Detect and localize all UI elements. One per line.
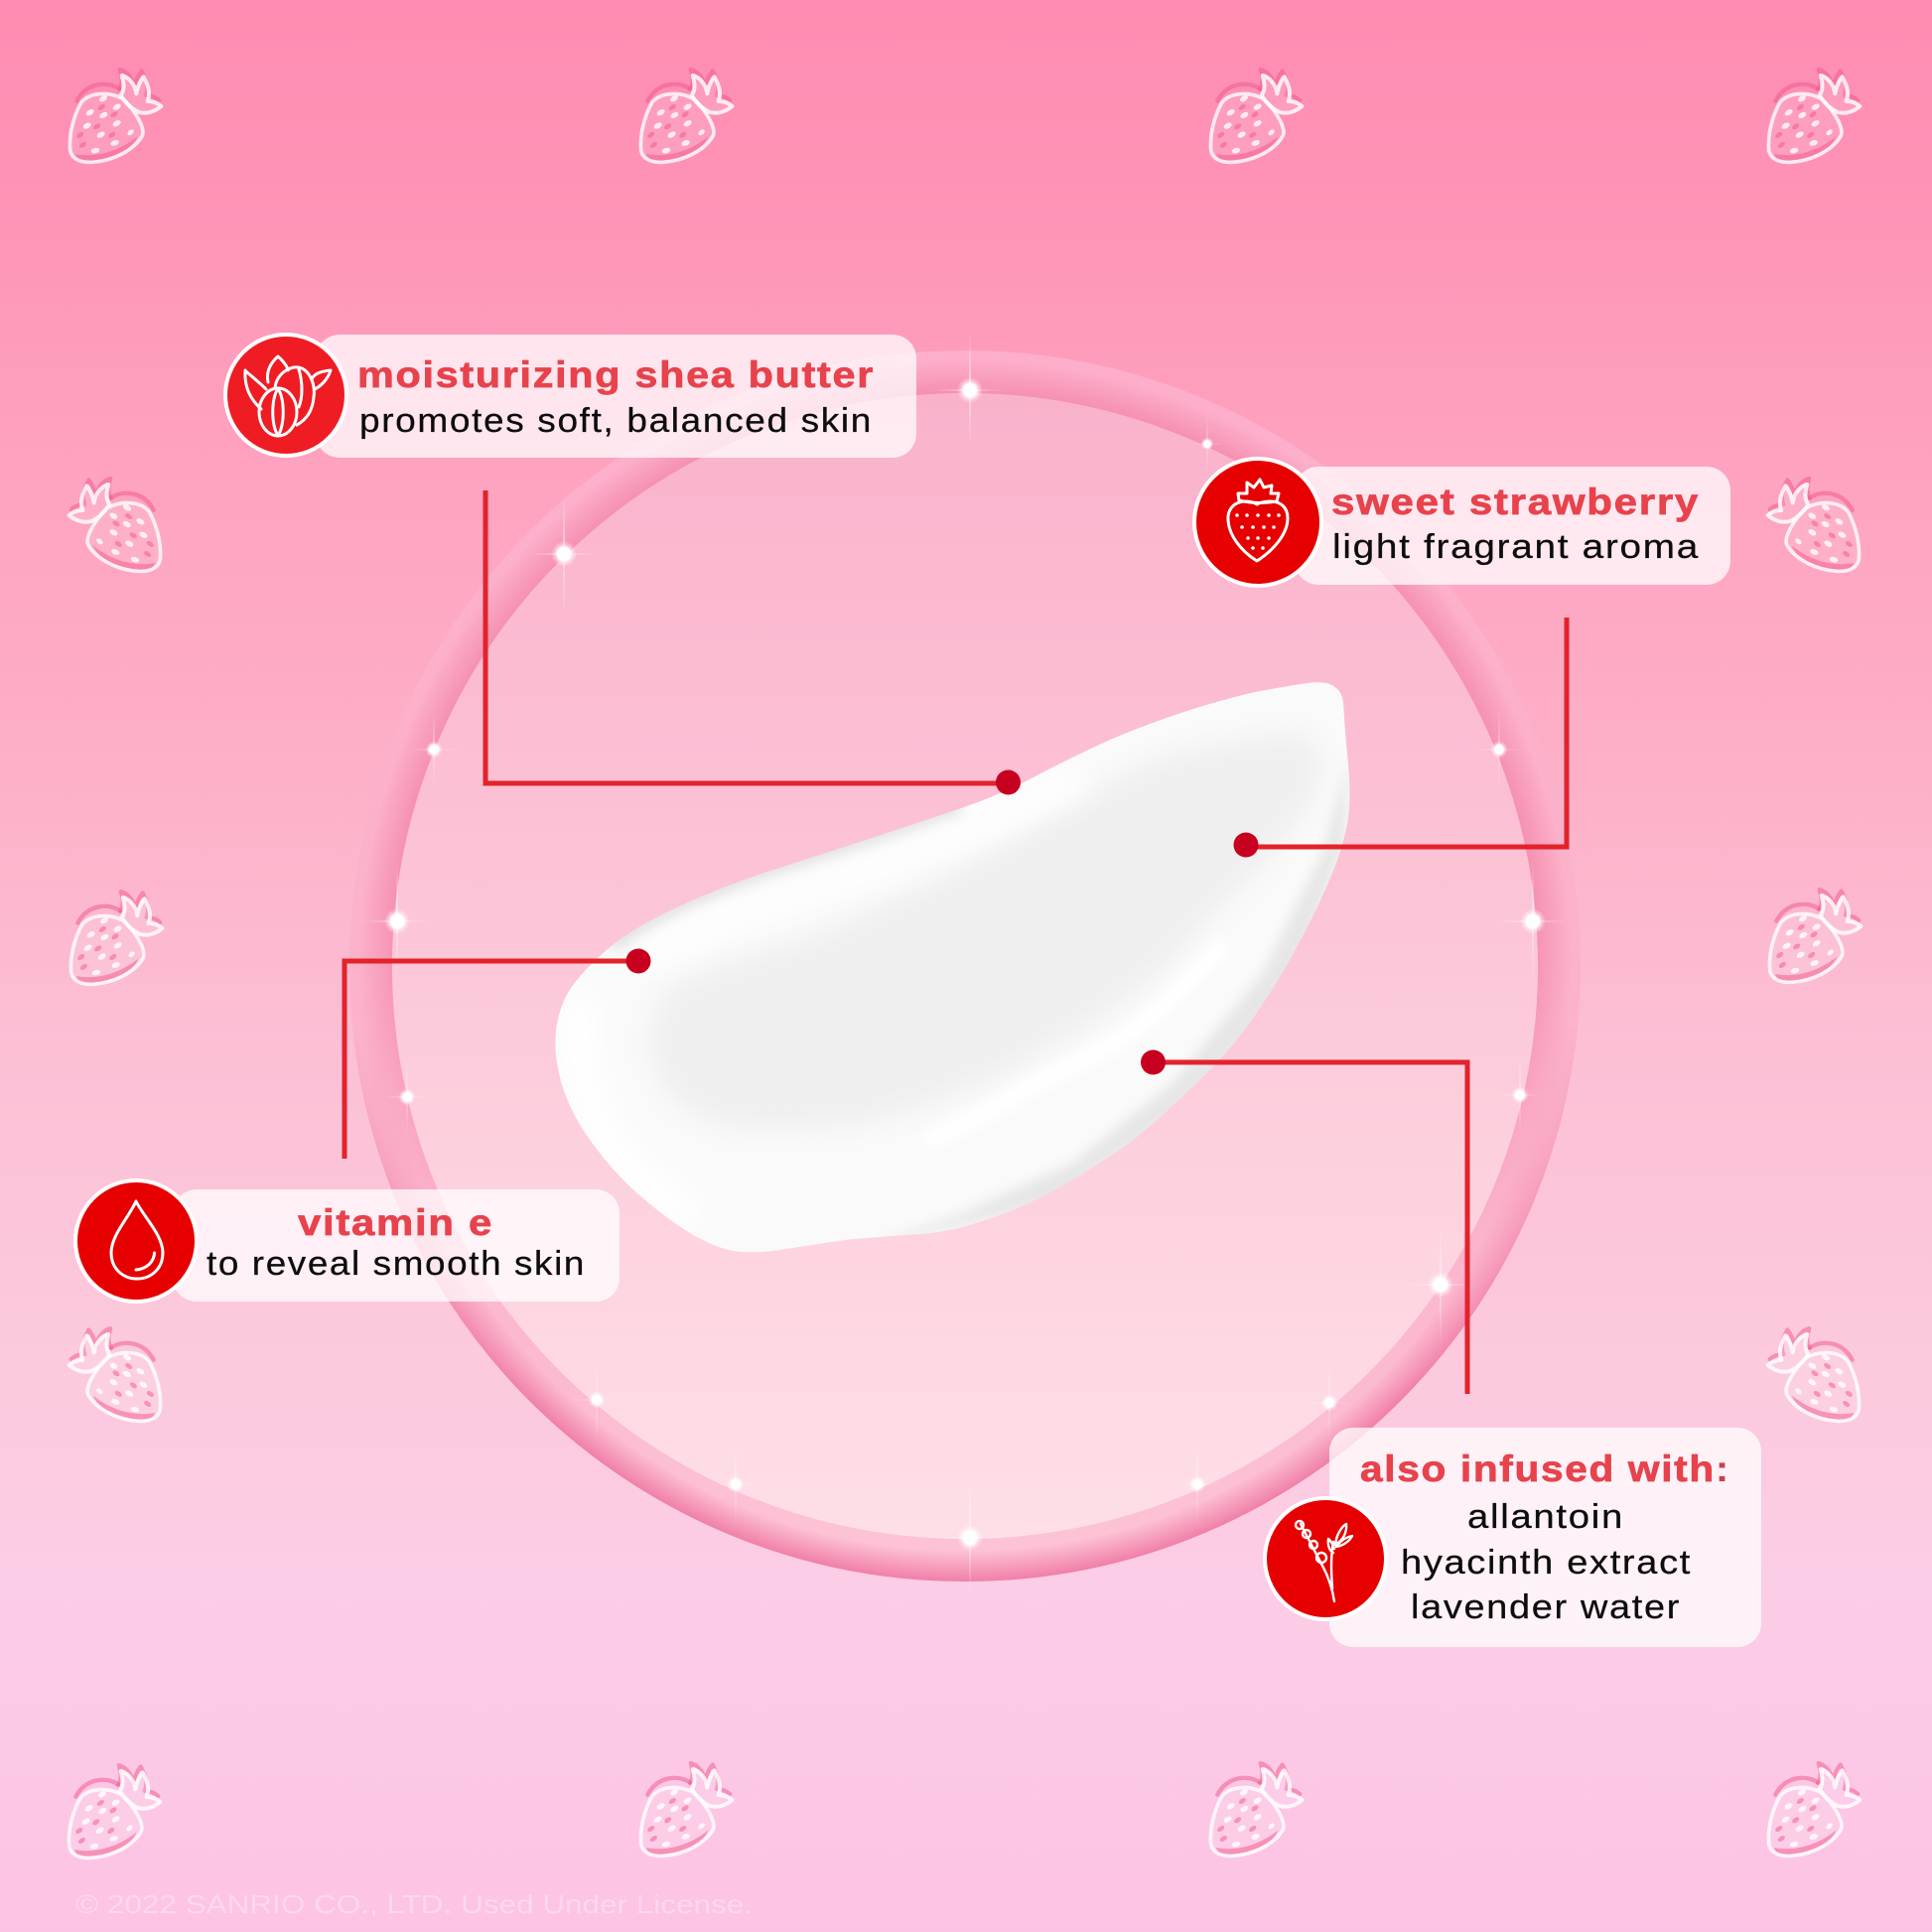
connector: vitamin e: [345, 949, 651, 1159]
connector: also infused: [1141, 1050, 1467, 1394]
glowing circle: [371, 371, 1559, 1561]
connector: shea butter: [485, 490, 1021, 794]
description: promotes soft, balanced skin: [359, 402, 873, 440]
cream swatch: [555, 682, 1349, 1263]
icon: shea nuts: [225, 335, 346, 456]
icon: lavender sprig: [1265, 1498, 1386, 1619]
callout: sweet strawberry: [1194, 459, 1730, 586]
icon: strawberry: [1194, 459, 1321, 586]
connector: strawberry: [1233, 618, 1567, 858]
ingredient list: allantoin: [1467, 1498, 1624, 1536]
description: light fragrant aroma: [1332, 528, 1700, 566]
ingredient list: [1401, 1498, 1692, 1626]
callout: moisturizing shea butter: [225, 335, 916, 458]
callout: vitamin e: [75, 1180, 620, 1302]
icon: droplet: [75, 1180, 197, 1302]
copyright: © 2022 SANRIO CO., LTD. Used Under License.: [75, 1889, 753, 1919]
heading: sweet strawberry: [1331, 482, 1700, 522]
sparkles on ring: [361, 331, 1569, 1597]
heading: vitamin e: [298, 1202, 493, 1243]
callout: also infused with: [1265, 1428, 1761, 1647]
description: to reveal smooth skin: [207, 1245, 586, 1283]
ingredient list: lavender water: [1411, 1588, 1681, 1626]
heading: also infused with :: [1360, 1449, 1730, 1489]
heading: moisturizing shea butter: [357, 354, 875, 395]
ingredient list: hyacinth extract: [1401, 1544, 1692, 1582]
